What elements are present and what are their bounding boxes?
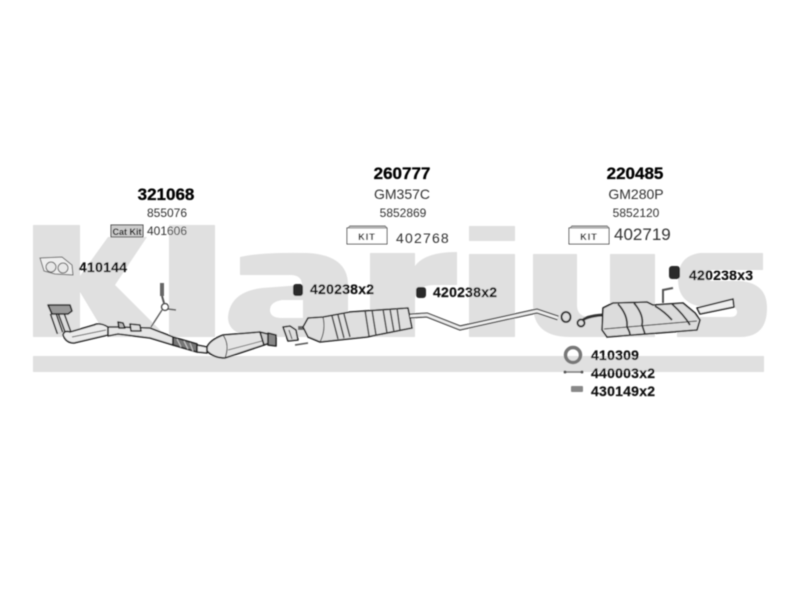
KIT badge 402719: KIT bbox=[580, 232, 598, 242]
column 2 labels: 260777 bbox=[374, 164, 430, 183]
oxygen sensor bbox=[151, 283, 176, 327]
gasket 410144 bbox=[40, 257, 127, 275]
cat kit badge: Cat Kit bbox=[112, 227, 142, 237]
column 1 labels: 401606 bbox=[147, 224, 187, 238]
column 1 labels bbox=[111, 185, 194, 238]
middle silencer and pipe bbox=[283, 308, 570, 345]
column 1 labels: 855076 bbox=[147, 206, 187, 220]
column 2 labels bbox=[374, 164, 430, 220]
column 3 labels: 220485 bbox=[607, 164, 663, 183]
clamp label 420238x3: 420238x3 bbox=[689, 267, 753, 283]
KIT badge 402719: 402719 bbox=[614, 225, 671, 244]
rear silencer bbox=[578, 288, 734, 337]
front pipe with catalytic converter bbox=[48, 305, 276, 358]
column 3 labels bbox=[607, 164, 664, 220]
KIT badge 402768: 402768 bbox=[396, 230, 450, 246]
column 3 labels: 5852120 bbox=[613, 206, 660, 220]
clamp label 420238x2 right: 420238x2 bbox=[433, 284, 497, 300]
gasket 410144: 410144 bbox=[79, 259, 127, 275]
KIT badge 402719 bbox=[569, 225, 671, 244]
bolt 440003: 440003x2 bbox=[591, 365, 655, 381]
column 1 labels: 321068 bbox=[138, 185, 194, 204]
column 2 labels: GM357C bbox=[374, 186, 430, 202]
hardware list bbox=[564, 347, 655, 399]
clamp label 420238x2 left: 420238x2 bbox=[310, 281, 374, 297]
background watermark: klarius logo bbox=[33, 225, 767, 372]
KIT badge 402768 bbox=[347, 226, 450, 246]
KIT badge 402768: KIT bbox=[358, 232, 376, 242]
ring 410309: 410309 bbox=[591, 347, 639, 363]
column 3 labels: GM280P bbox=[608, 186, 664, 202]
column 2 labels: 5852869 bbox=[380, 206, 427, 220]
clip 430149: 430149x2 bbox=[591, 383, 655, 399]
